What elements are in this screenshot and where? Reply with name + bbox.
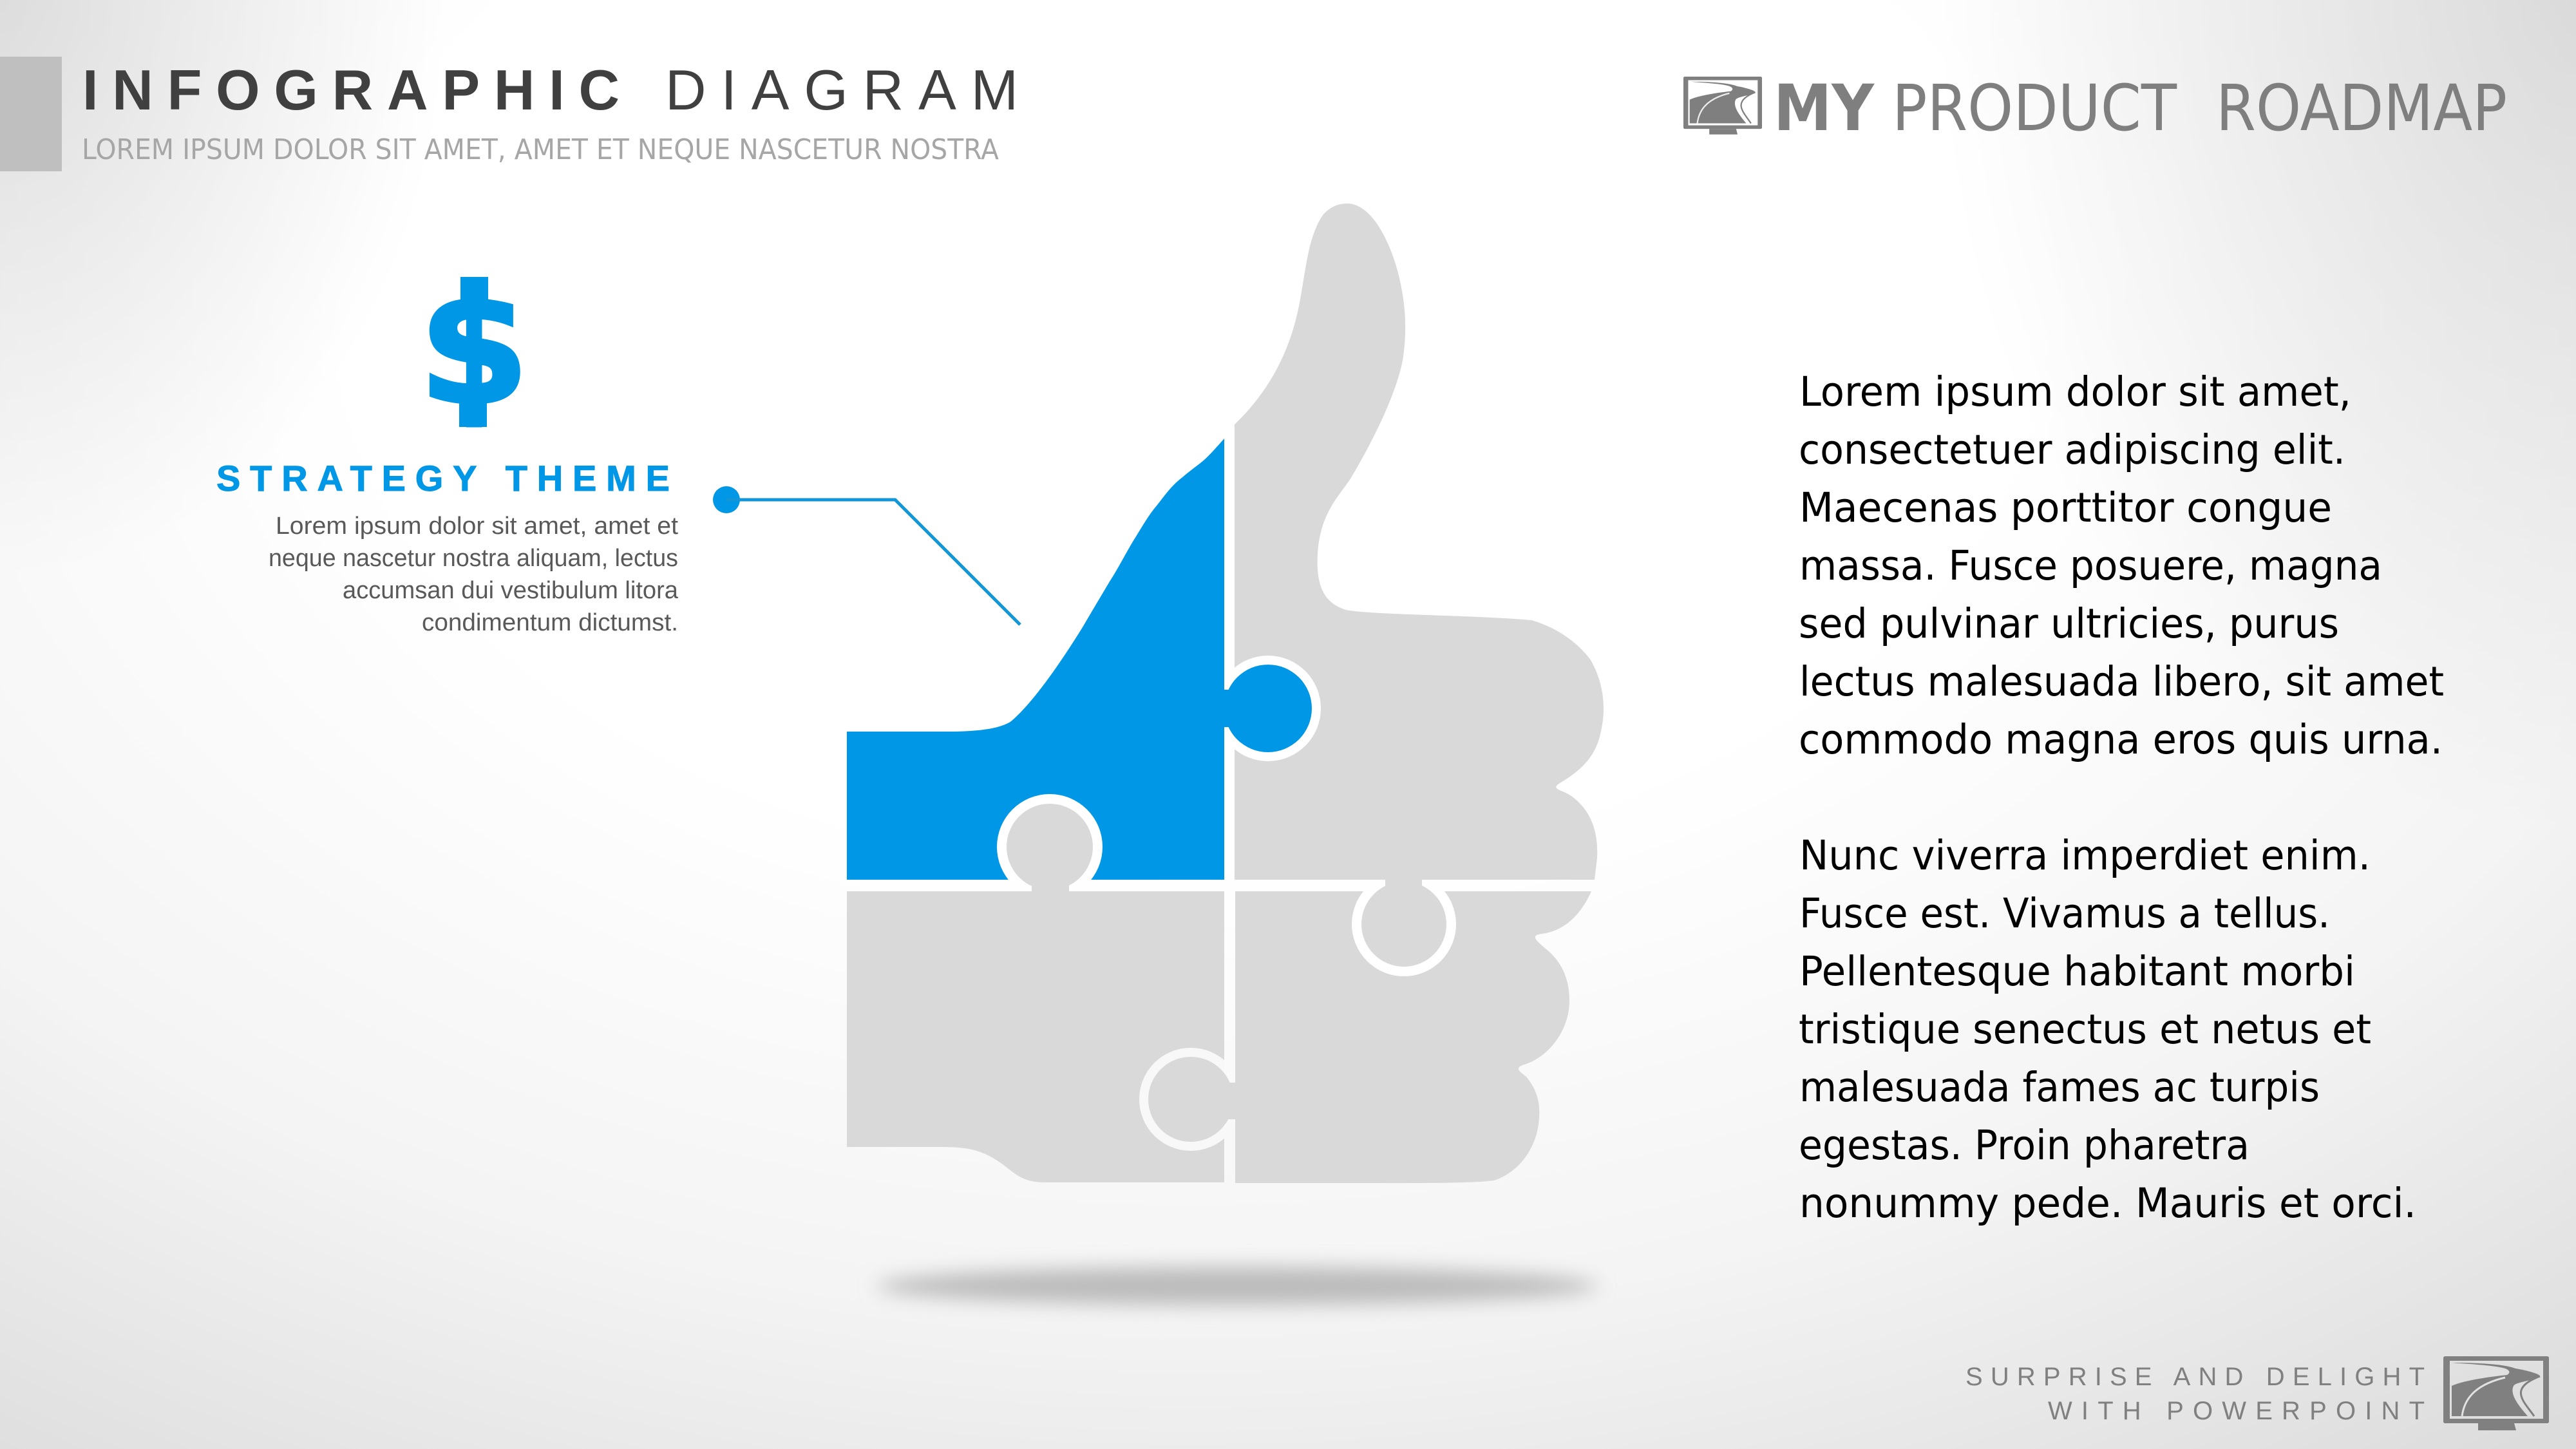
strategy theme heading: STRATEGY THEME bbox=[216, 458, 670, 498]
body paragraph 2: malesuada fames ac turpis bbox=[1799, 1064, 2320, 1111]
brand heading: ROADMAP bbox=[2216, 71, 2507, 146]
knob: gray tab into blue bbox=[997, 794, 1103, 900]
brand heading: MY bbox=[1774, 71, 1875, 146]
body paragraph 1: massa. Fusce posuere, magna bbox=[1799, 542, 2382, 589]
puzzle piece: upper right bbox=[1235, 204, 1604, 880]
body paragraph 2: Fusce est. Vivamus a tellus. bbox=[1799, 890, 2330, 937]
body paragraph 1: lectus malesuada libero, sit amet bbox=[1799, 658, 2444, 705]
knob: blue tab bbox=[1215, 656, 1321, 761]
body paragraph 2: Nunc viverra imperdiet enim. bbox=[1799, 832, 2371, 879]
icon: road monitor logo top bbox=[1683, 77, 1762, 135]
body paragraph 1: sed pulvinar ultricies, purus bbox=[1799, 600, 2339, 647]
icon: dollar sign: $ bbox=[419, 256, 529, 440]
body paragraph 1 bbox=[1799, 368, 2444, 763]
footer tagline: SURPRISE AND DELIGHT bbox=[1965, 1363, 2425, 1391]
icon: road monitor logo bottom bbox=[2443, 1356, 2549, 1430]
strategy theme text: neque nascetur nostra aliquam, lectus bbox=[269, 545, 678, 572]
strategy theme text: Lorem ipsum dolor sit amet, amet et bbox=[276, 513, 678, 540]
puzzle piece: upper left blue bbox=[847, 439, 1224, 880]
body paragraph 2: nonummy pede. Mauris et orci. bbox=[1799, 1180, 2416, 1227]
shadow under thumb bbox=[876, 1267, 1598, 1305]
body paragraph 2: egestas. Proin pharetra bbox=[1799, 1122, 2249, 1169]
brand heading bbox=[1774, 71, 2507, 146]
title bbox=[82, 58, 1018, 122]
title accent block bbox=[0, 57, 62, 171]
puzzle piece: lower left bbox=[847, 891, 1224, 1182]
body paragraph 2: tristique senectus et netus et bbox=[1799, 1006, 2371, 1053]
knob: gray tab downward bbox=[1352, 872, 1456, 976]
footer tagline bbox=[1965, 1363, 2425, 1425]
title: DIAGRAM bbox=[665, 58, 1018, 122]
body paragraph 1: Maecenas porttitor congue bbox=[1799, 484, 2332, 531]
body paragraph 1: Lorem ipsum dolor sit amet, bbox=[1799, 368, 2351, 415]
brand heading: PRODUCT bbox=[1892, 71, 2177, 146]
subtitle: LOREM IPSUM DOLOR SIT AMET, AMET ET NEQUE NASCETUR NOSTRA bbox=[82, 133, 999, 166]
body paragraph 2: Pellentesque habitant morbi bbox=[1799, 948, 2355, 995]
callout connector bbox=[713, 486, 1020, 625]
strategy theme text: accumsan dui vestibulum litora bbox=[343, 577, 679, 604]
body paragraph 1: commodo magna eros quis urna. bbox=[1799, 716, 2443, 763]
body paragraph 2 bbox=[1799, 832, 2416, 1227]
strategy theme text: condimentum dictumst. bbox=[422, 609, 678, 636]
footer tagline: WITH POWERPOINT bbox=[2048, 1397, 2425, 1425]
knob: gray tab leftward bbox=[1139, 1048, 1242, 1151]
title: INFOGRAPHIC bbox=[82, 58, 620, 122]
thumbs-up puzzle bbox=[847, 204, 1604, 1183]
body paragraph 1: consectetuer adipiscing elit. bbox=[1799, 426, 2345, 473]
puzzle piece: lower right bbox=[1235, 891, 1591, 1183]
strategy theme text bbox=[269, 513, 679, 636]
